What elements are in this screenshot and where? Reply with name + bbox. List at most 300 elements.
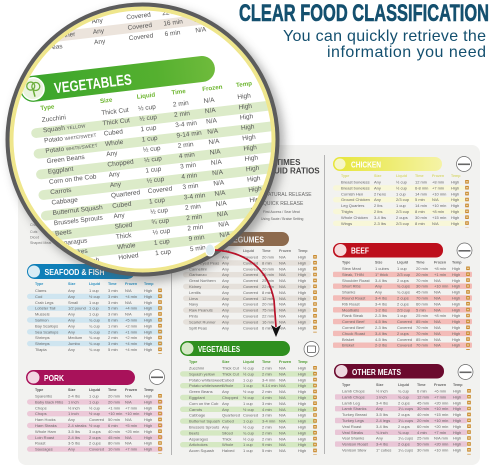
seafood table: 5 min [108,306,118,311]
cooking times heading block: ATURAL RELEASE [268,192,312,198]
magnified vegetables table: Brussels Sprouts [54,215,104,227]
pork table: 1 inch [68,411,79,416]
vegetables small table: 3-4 min [262,377,275,382]
seafood table: High [144,288,152,293]
pork table: Loin Roast [35,435,55,440]
other meats table: Venison Stew [342,448,366,452]
magnified legume rows: Covered [127,22,153,32]
vegetables small table: Time [262,360,271,364]
legumes table: 20 min [262,302,274,307]
beef table: Round Roast [342,296,366,300]
seafood table: 1 cup [89,312,100,317]
seafood table: Any [68,318,75,322]
vegetables small table: ½ cup [243,407,255,412]
vegetables small table: Any [222,407,229,412]
vegetables small table: High [298,366,306,370]
seafood table: Frozen [125,282,138,286]
legumes table: Garbanzo [189,272,207,277]
seafood table: Jumbo [68,341,81,346]
beef table: Corned Beef [342,325,365,330]
other meats table: 60 min [417,424,429,429]
pork table: High [144,441,152,446]
vegetables small table: Covered [243,413,258,418]
seafood table: ¾ cup [89,341,101,346]
vegetables small table: 2 min [262,430,272,435]
vegetables small table: High [298,383,306,388]
pork table: 2 cups [89,435,101,440]
chicken table: Thighs [341,209,353,214]
legumes table: N/A [279,278,286,283]
legumes table: Any [222,314,229,318]
pork table: High [144,394,152,398]
magnified vegetables table: Carrots [50,187,73,196]
beef table: 2 cups [397,296,409,300]
seafood table: Time [108,282,117,286]
beef table: 85 min [416,337,428,342]
magnified vegetables table: 4 min [181,172,198,181]
magnified vegetables table: Covered [147,185,173,195]
magnified vegetables table: Cubed [103,128,124,138]
magnified vegetables table: WHITE/SWEET [64,133,97,141]
beef table: 70 min [416,325,428,330]
seafood table: +5 min [125,318,137,322]
pork table: ½ cup [89,405,101,410]
magnified legume rows: Scarlet Runner [32,31,77,43]
vegetables small table: 2 min [262,436,272,441]
legumes table: Black Eyed Peas [189,260,219,265]
beef table: N/A [434,290,441,295]
vegetables small table: High [298,407,306,412]
seafood table: 1 cup [89,300,100,305]
magnified legume rows: Any [92,28,105,36]
beef table: 25 min [416,313,428,318]
pork table: High [144,423,152,428]
legumes table: 8 min [262,290,272,295]
chicken table: High [451,221,459,226]
pork table: N/A [125,435,132,440]
seafood table: 3 min [108,300,118,305]
chicken table: 2/3 cup [396,197,410,202]
panel: other meats [334,364,473,454]
magnifier circle [8,0,298,275]
legumes table: N/A [279,290,286,295]
cooking times heading block [261,158,320,221]
seafood table: Small [68,300,78,305]
pork table: 40 min [108,429,120,434]
other meats table: Turkey Legs [342,418,364,423]
seafood table: +1 min [125,329,137,334]
magnified column headers: Type [40,103,55,112]
seafood table: Any [68,347,75,352]
beef table: ¾ cups [397,284,410,289]
chicken table: N/A [432,221,439,226]
pork table: High [144,399,152,404]
other meats table: ¾ cup [398,394,410,399]
seafood table: N/A [125,288,132,293]
seafood table: Shrimps [35,335,50,340]
magnified vegetables table: 4 min [179,151,196,160]
seafood table: Tilapia [35,347,47,352]
chicken table: +7 min [432,185,444,190]
legumes table: N/A [279,302,286,307]
vegetables small table: 5 min [262,448,272,453]
magnified vegetables table: N/A [218,221,230,229]
magnified vegetables table: High [246,165,260,173]
magnified vegetables table: 2 min [173,100,190,109]
magnified vegetables table: ½ cup [146,175,165,185]
legumes table: 22 min [262,314,274,318]
beef table: 2 cups [397,278,409,283]
pork table: 2-4 steaks [68,423,86,428]
vegetables small table: Green Beans [189,389,213,394]
seafood table: Lobster Tail [35,306,55,311]
vegetables small table: Temp [298,360,308,364]
magnified vegetables table: Thick Cut [102,117,130,127]
magnified vegetables table: ½ cup [142,144,161,154]
beef table: High [452,278,460,283]
seafood table: 3 min [108,341,118,346]
seafood table: 1 cup [89,288,100,293]
beef table: Temp [452,260,462,264]
seafood table: Cod [35,294,42,299]
seafood table [27,282,163,354]
magnified vegetables table: High [249,196,264,204]
vegetables small table: Any [222,424,229,430]
vegetables small table: Eggplant [189,395,206,400]
vegetables small table: Chopped [222,395,238,400]
beef table: 1 cup [397,313,408,318]
legumes table: High [298,254,306,260]
vegetables small table: Butternut Squash [189,419,220,424]
legumes table: Temp [298,249,308,253]
pork table: Ham Hocks [35,417,56,422]
vegetables small table: Zucchini [189,366,204,370]
vegetables small table: High [298,395,306,400]
magnified column headers: Time [171,88,187,97]
vegetables small table: ½ cup [243,436,255,441]
beef table: N/A [434,331,441,336]
seafood table: ¾ cup [89,329,101,334]
other meats table: ¾ inch [376,430,388,435]
vegetables small table: Asparagus [189,436,208,441]
beef table: N/A [434,278,441,283]
beef table: High [452,296,460,300]
magnified vegetables table: ½ cup [139,113,158,123]
pork table: +10 min [108,411,122,416]
chicken table: Wings [341,221,352,226]
legumes table: 22 min [262,284,274,289]
pork table: High [144,405,152,410]
magnified legume rows: 16 min [163,18,184,28]
beef table: 2 cups [397,301,409,306]
other meats table: 1 inch [376,394,387,399]
beef table: Brisket [342,343,355,348]
beef table: 1" thick [375,272,388,277]
vegetables small table: High [298,436,306,441]
pork bar: PORK [44,373,65,383]
legumes table: High [298,314,306,318]
pork table: N/A [125,399,132,404]
other meats table: 1¼ cups [398,436,413,441]
beef table: 70 min [416,343,428,348]
legumes table: 12 min [262,296,274,301]
legumes table: Covered [243,254,258,260]
legumes table: Any [222,290,229,295]
pork table: High [144,417,152,422]
beef table: 20 min [416,266,428,271]
beef table: 70 min [416,331,428,336]
magnified vegetables table: Butternut Squash [52,204,103,217]
pork table: +10 min [125,411,139,416]
magnified legume rows: 22 min [162,8,182,17]
pork table: Frozen [125,388,138,392]
pork table: Any [68,447,75,452]
legumes table: N/A [279,266,286,271]
legumes table: Any [222,325,229,330]
other meats table: +20 min [434,400,448,405]
vegetables small table: High [298,419,306,424]
chicken table: Breast boneless [341,180,370,184]
panel: left cut-off rows: Cuts [30,230,38,234]
magnified legume rows: Lima [31,24,46,33]
magnified vegetables table: 3-4 min [183,192,206,202]
chicken table: Frozen [432,174,445,178]
beef table: 60 min [416,301,428,306]
other meats table: Time [417,383,426,387]
legumes table: High [298,296,306,301]
chicken table: 8 min [415,221,425,226]
seafood table: +2 min [125,323,137,328]
other meats table: Lamb Chops [342,394,365,399]
beef table: Covered [397,343,412,348]
pork table: High [144,447,152,452]
chicken bar: CHICKEN [351,160,381,170]
pork table: High [144,429,152,434]
legumes table: N/A [279,296,286,301]
vegetables small table: High [298,424,306,430]
magnified vegetables table: N/A [209,148,222,157]
magnified vegetables table: N/A [215,200,228,208]
legumes table: Covered [243,319,258,324]
magnified legume rows: N/A [195,26,207,34]
beef table: Frozen [434,260,447,264]
magnified vegetables table: 5 min [190,244,206,253]
other meats table: Veal Shanks [342,436,364,441]
pork table: ½ cup [89,423,101,428]
magnified column headers: Temp [236,80,253,89]
beef table: 70 min [416,278,428,283]
other meats table: +10 min [434,406,448,411]
beef table: 2-3 lbs [375,325,387,330]
beef table: High [452,337,460,342]
legumes table: Great Northern [189,278,216,283]
chicken table: Liquid [396,174,408,178]
magnified vegetables table: High [253,227,267,235]
chicken table: +10 min [432,191,446,196]
chicken table: Type [341,174,349,178]
beef table: Any [375,290,382,295]
magnified vegetables table: High [252,216,266,225]
legumes table: High [298,325,306,330]
other meats table: +20 min [434,442,448,447]
beef table: 3-4 lbs [375,331,387,336]
magnified legume rows: N/A [194,16,206,24]
magnified vegetables table: High [237,92,252,101]
other meats table: 2 cups [398,400,410,405]
legumes table: Lima [189,296,198,301]
magnified legume rows: Split Peas [33,43,64,53]
pork table: +1 min [108,405,120,410]
magnified vegetables table: 2 min [185,203,202,212]
magnified vegetables table: Thick Cut [101,107,129,117]
seafood table: +4 min [125,294,137,299]
beef table: Steak, THIN [342,272,364,277]
seafood table: 3 min [108,288,118,293]
other meats table: High [453,430,461,435]
seafood table: High [144,306,152,311]
magnified vegetables table: Any [113,212,126,220]
other meats table: +10 min [434,448,448,452]
legumes table: Covered [243,284,258,289]
other meats table: Lamb Shanks [342,406,366,411]
vegetables small table: 3-4 min [262,419,275,424]
subtitle: information you need [327,44,486,61]
vegetables small table: 4 min [262,395,272,400]
legumes table: Split Peas [189,325,207,330]
beef table: N/A [434,301,441,306]
beef table: +8 min [434,266,446,271]
other meats table: Any [376,436,383,441]
magnified vegetables table: Potato [44,135,65,145]
seafood table: 3 min [108,312,118,317]
magnifier shadow [10,7,284,281]
seafood table: 5 min [108,347,118,352]
chicken table: High [451,197,459,202]
seafood table: ¾ cup [89,318,101,322]
seafood table: Any [68,323,75,328]
legumes table: Any [222,278,229,283]
other meats table: 30 min [417,448,429,452]
beef table: Covered [397,319,412,324]
magnified vegetables table: 9-14 min [176,130,202,140]
chicken table: Leg Quarters [341,203,364,208]
magnified vegetables table: High [242,134,256,142]
legumes table: High [298,302,306,307]
legumes table: Any [222,272,229,277]
vegetables small table: 3 min [262,413,272,418]
other meats table: +6 min [434,388,446,394]
vegetables small table: N/A [279,442,286,447]
pork table: ½ cup [89,411,101,416]
vegetables small table: Size [222,360,229,364]
beef table: +1 min [434,272,446,277]
beef table: +8 min [434,313,446,318]
other meats table: High [453,400,461,405]
magnified vegetables table: 2 min [174,110,191,119]
seafood table: Any [68,288,75,293]
other meats table: Veal Steaks [342,430,363,435]
vegetables small table: Acorn Squash [189,448,214,453]
other meats table: 12 min [417,394,429,399]
magnified vegetables table: Sliced [114,222,133,231]
legumes table: Any [222,308,229,313]
seafood table: Crab Legs [35,300,53,305]
seafood table: +4 min [125,341,137,346]
magnified vegetables table: Potato [45,146,66,155]
legumes table: Covered [243,296,258,301]
panel: left cut-off rows: Diced [30,236,39,240]
legumes table: Covered [243,308,258,313]
vegetables small table: Cubed [222,377,234,382]
legumes table: High [298,266,306,271]
pork table: 3 cups [89,429,101,434]
magnified vegetables table: Any [108,171,121,179]
other meats table: ¾ cup [398,430,410,435]
legumes table: 16 min [262,319,274,324]
magnified vegetables table: 9 min [188,234,205,243]
seafood table: Any [68,329,75,334]
legumes table: High [298,272,306,277]
pork table: Time [108,388,117,392]
chicken table: Size [374,174,381,178]
beef table: Covered [397,325,412,330]
pork table: 2-4 lbs [68,394,80,398]
chicken table: 6-8 min [415,185,428,190]
beef table: ¾ cups [397,290,410,295]
legumes table: 20 min [262,254,274,260]
cooking times heading block: Using Saute / Braise Setting [261,217,304,221]
other meats table: 4 min [417,430,427,435]
vegetables small table: 1 cup [243,419,254,424]
pork table: 1 inch [68,399,79,404]
beef table: Rib Roast [342,301,360,306]
magnified column headers: Frozen [202,84,223,93]
other meats table: Size [376,383,383,387]
chicken table: 2/3 cup [396,209,410,214]
legumes table: Any [222,254,229,260]
panel: left cut-off rows: Shaped Meat [30,241,51,245]
vegetables small table: High [298,371,306,376]
seafood table: High [144,318,152,322]
beef table: High [452,272,460,277]
beef table: 4-5 lbs [375,319,387,324]
magnified vegetables table: 3 min [182,182,199,191]
magnified vegetables table: N/A [219,231,231,239]
vegetables small table: 1 cup [243,383,254,388]
pork table: Temp [144,388,154,392]
magnified vegetables table: 1 cup [140,124,157,133]
pork table [27,388,163,454]
legumes table: N/A [279,325,286,330]
chicken table: High [451,185,459,190]
chicken table: 2 lbs [374,203,382,208]
vegetables small table: 2 min [262,371,272,376]
beef table: Corned Beef [342,319,365,324]
magnified vegetables table: High [244,154,259,163]
vegetables small table: ½ cup [243,395,255,400]
legumes table: Cannellini [189,266,207,271]
chicken table: 1 cup [396,203,407,208]
pork table: 3-5 lbs [68,429,80,434]
other meats table: Any [376,406,383,411]
seafood table: +2 min [125,335,137,340]
beef table: 4-5 lbs [375,337,387,342]
other meats table: Type [342,383,350,387]
magnified vegetables table: 2 min [187,224,204,233]
beef table: +10 min [434,284,448,289]
legumes table: Any [222,296,229,301]
other meats table: High [453,442,461,447]
